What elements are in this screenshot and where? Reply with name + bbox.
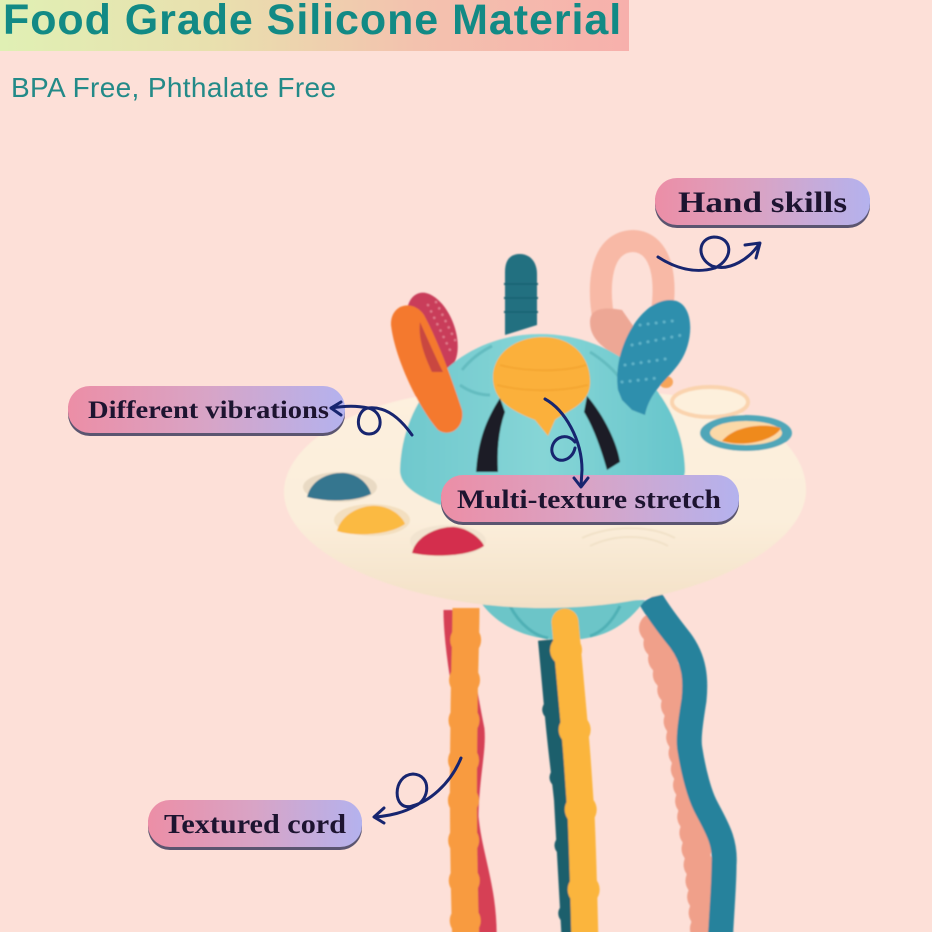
salmon cord (654, 628, 706, 932)
callout: different vibrations (68, 386, 345, 436)
teal bubble (303, 472, 377, 502)
red paddle (396, 286, 468, 378)
teal cord (650, 598, 724, 932)
callout: hand skills (655, 178, 870, 228)
arrow: vibrations (331, 402, 412, 435)
teal hole ring (700, 415, 792, 451)
subtitle: BPA Free, Phthalate Free (11, 72, 336, 103)
dome ridges (460, 346, 618, 395)
callout: textured cord (148, 800, 362, 850)
peach hole ring (659, 376, 748, 417)
callout: multi-texture stretch: Multi-texture stretch (457, 485, 722, 514)
saucer ridge texture (582, 528, 675, 546)
back teal stem (504, 254, 538, 335)
title banner (0, 0, 629, 51)
saucer (284, 388, 806, 608)
lower hub (482, 600, 645, 640)
cords (456, 598, 724, 932)
callout: textured cord: Textured cord (164, 809, 346, 839)
red cord (456, 610, 484, 932)
yellow bubble (334, 504, 410, 536)
dome slots (476, 396, 620, 472)
yellow cord (565, 622, 585, 932)
dark teal cord (546, 640, 570, 932)
teal paddle (617, 300, 690, 415)
hub dome (400, 334, 685, 505)
callout: different vibrations: Different vibrations (88, 397, 329, 424)
orange ring (391, 305, 462, 433)
arrow: multi-texture (545, 399, 588, 487)
pop bubbles (303, 472, 486, 557)
arrow: hand skills (658, 237, 760, 270)
toy (284, 241, 806, 932)
yellow flower tab (493, 337, 590, 436)
red bubble (410, 525, 486, 557)
peach base (590, 308, 650, 362)
callout: multi-texture stretch (441, 475, 739, 525)
orange cord (463, 608, 466, 932)
arrow: textured cord (374, 758, 461, 823)
peach ring (601, 241, 664, 322)
callout: hand skills: Hand skills (678, 186, 847, 219)
